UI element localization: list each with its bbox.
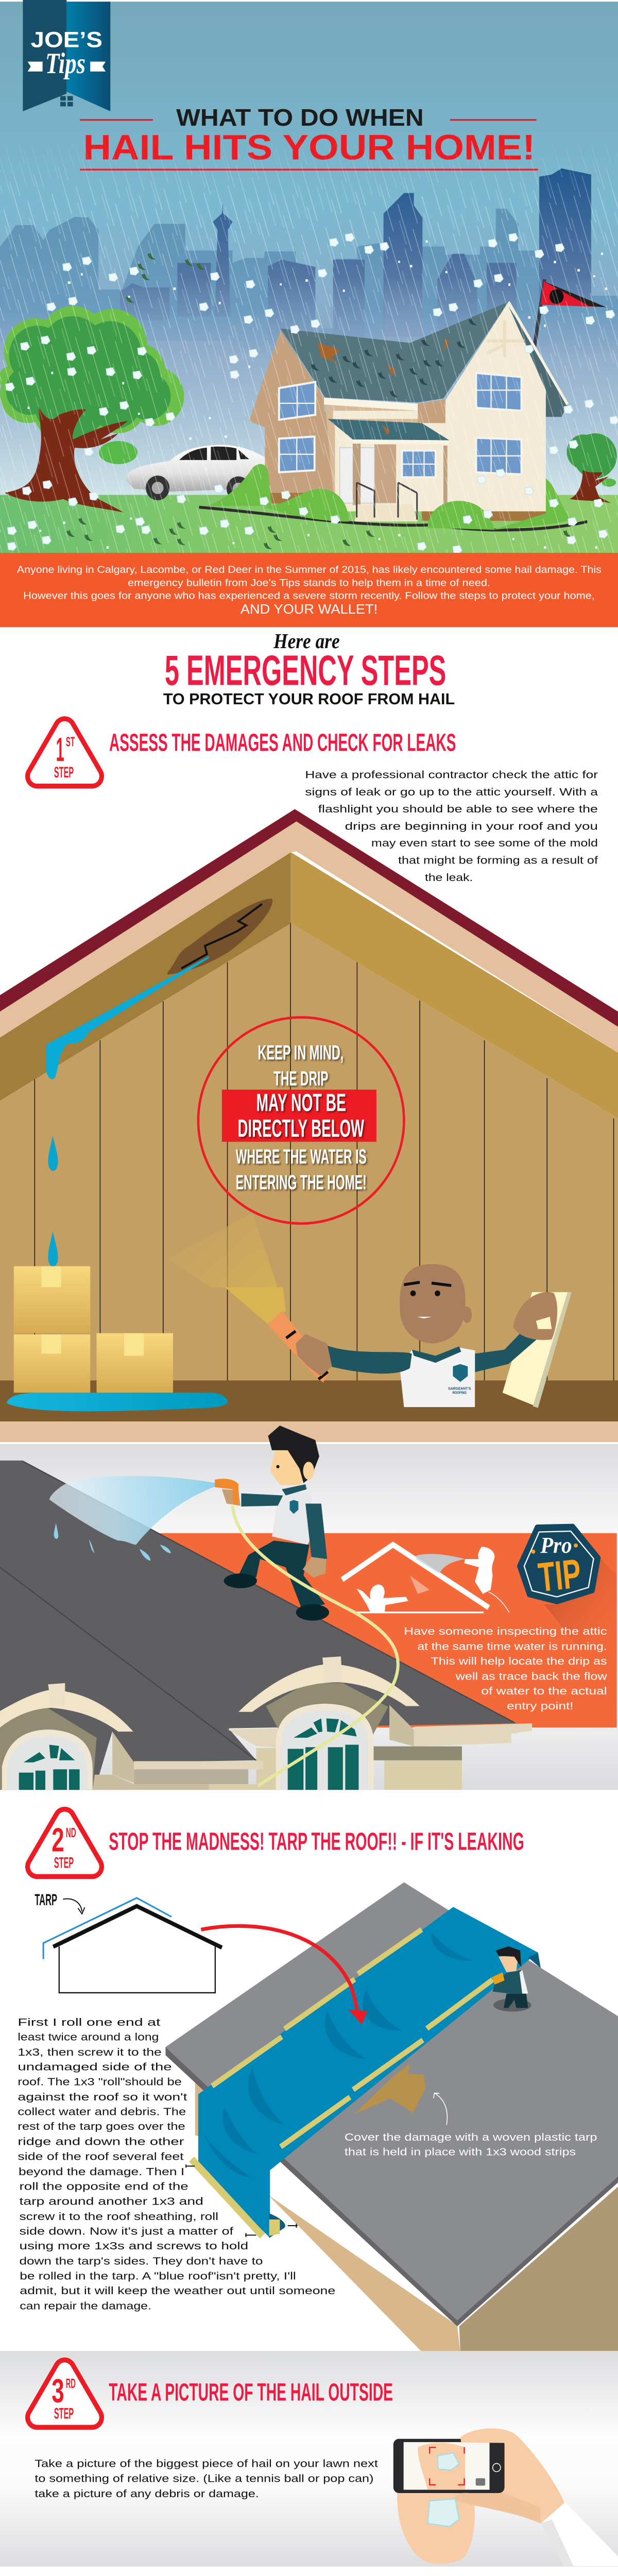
flashlight beam: [167, 1213, 286, 1325]
tip text: well as trace back the flow: [455, 1671, 607, 1683]
callout circle: keep in mind: MAY NOT BE: [256, 1089, 346, 1116]
step 2 body text: collect water and debris. The: [18, 2106, 186, 2118]
puddle: [7, 1393, 228, 1411]
step 2 body text: [18, 2016, 335, 2312]
hose scene: pro tip: [0, 1426, 618, 1790]
callout circle: keep in mind: WHERE THE WATER IS: [236, 1146, 367, 1168]
thumb over phone edge: [455, 2493, 541, 2523]
hailstones: [6, 233, 618, 554]
right hand behind phone: [455, 2428, 564, 2523]
tarp caption: [345, 2132, 597, 2158]
step 3 badge: STEP: [54, 2405, 74, 2422]
shirt cuff: [541, 2501, 618, 2566]
pro tip badge: TIP: [536, 1550, 583, 1601]
step 2 badge: [37, 1819, 92, 1872]
step 2 body text: against the roof so it won't: [18, 2092, 187, 2103]
step 2 body text: ridge and down the other: [18, 2136, 184, 2148]
city skyline: [0, 168, 618, 353]
left dormer: [0, 1703, 97, 1790]
tarp arrow: [63, 1899, 85, 1914]
title: WHAT TO DO WHEN: [176, 104, 424, 131]
floor trim: [0, 1421, 618, 1442]
tarp label: TARP: [35, 1891, 57, 1909]
phone body: [393, 2439, 505, 2493]
step 2 body text: be rolled in the tarp. A "blue roof"isn't pretty, I'll: [20, 2270, 296, 2282]
step 1 heading: [37, 728, 598, 884]
scene background: [0, 1444, 618, 1790]
tip text: of water to the actual: [481, 1686, 607, 1697]
step 2 badge: ND: [66, 1825, 76, 1840]
step 2 body text: side down. Now it's just a matter of: [20, 2226, 234, 2238]
step 3 body text: take a picture of any debris or damage.: [35, 2488, 259, 2500]
banner: Joe's Tips: Tips: [45, 47, 85, 80]
step 1 badge: 1: [56, 731, 64, 768]
attic illustration: lower part with Joe: [0, 1264, 618, 1442]
attic wall: [0, 923, 618, 1289]
boxes: [14, 1266, 173, 1393]
step 2 badge: 2: [52, 1821, 64, 1859]
dents on ground: [66, 252, 572, 549]
roof top: [0, 809, 618, 1027]
step 3 body text: to something of relative size. (Like a tennis ball or pop can): [35, 2473, 374, 2485]
step 1 body text: [305, 769, 598, 884]
rain: [0, 135, 618, 553]
title: HAIL HITS YOUR HOME!: [83, 128, 535, 167]
intro band: Anyone living in Calgary, Lacombe, or Red Deer in the Summer of 2015, has likely encountered some hail damage. This: [17, 564, 602, 575]
windows: [279, 373, 522, 477]
tip text: at the same time water is running.: [417, 1641, 607, 1652]
phone and hands illustration: [393, 2428, 618, 2566]
man on roof with hose: [215, 1426, 398, 1786]
5 emergency steps headline: 5 EMERGENCY STEPS: [165, 647, 446, 694]
dents on roof: [311, 318, 477, 397]
step 3 badge: 3: [52, 2372, 64, 2410]
intro band: AND YOUR WALLET!: [241, 602, 377, 617]
water spray: [49, 1476, 217, 1545]
callout circle: keep in mind: KEEP IN MIND,: [258, 1042, 344, 1064]
water stream: [46, 956, 209, 1079]
roll end: [269, 2213, 285, 2238]
house roof with dormers: [0, 1461, 532, 1790]
phone screen: [404, 2442, 490, 2490]
step 3 badge: [37, 2370, 92, 2422]
Joe holding flashlight and paper: [268, 1264, 572, 1408]
step 1 badge: [37, 728, 92, 781]
right dormer: [266, 1683, 388, 1790]
step 2 body text: undamaged side of the: [18, 2061, 172, 2073]
tarp illustration: [18, 1883, 618, 2352]
pro tip badge shadow: [544, 1559, 617, 1657]
nails: [186, 2164, 298, 2237]
attic illustration: upper part: [0, 809, 618, 1325]
step 2 body text: tarp around another 1x3 and: [20, 2196, 203, 2207]
small worker: [492, 1946, 531, 2012]
intro band: emergency bulletin from Joe's Tips stands to help them in a time of need.: [128, 577, 490, 588]
step 1 badge: STEP: [54, 765, 74, 781]
tip text: Have someone inspecting the attic: [404, 1625, 607, 1637]
right small tree: [567, 433, 617, 503]
step 3: [0, 2351, 618, 2567]
orange tip panel: [160, 1533, 617, 1727]
wood strips: [192, 1929, 493, 2236]
intro band: However this goes for anyone who has experienced a severe storm recently. Follow the steps to protect your home,: [23, 590, 595, 601]
step 3 title: TAKE A PICTURE OF THE HAIL OUTSIDE: [109, 2379, 393, 2406]
step 1 badge: ST: [66, 735, 75, 750]
here are: Here are: [273, 629, 340, 653]
house: [199, 302, 587, 530]
blue tarp: [198, 1907, 541, 2238]
step 2 body text: First I roll one end at: [18, 2016, 161, 2028]
step 2 body text: down the tarp's sides. They don't have to: [20, 2256, 263, 2267]
callout circle: keep in mind: ENTERING THE HOME!: [236, 1172, 367, 1194]
callout circle: keep in mind: THE DRIP: [273, 1067, 329, 1090]
water drips: [48, 1136, 58, 1267]
thin arrow: [434, 2093, 447, 2125]
tip icon: house with two figures: [342, 1545, 509, 1613]
step 1 body text: may even start to see some of the mold: [371, 838, 598, 849]
pro tip badge: [520, 1526, 598, 1602]
big roof: [165, 1883, 618, 2352]
Joe holding flashlight and paper: SARGEANT'S: [448, 1387, 471, 1391]
step 2 badge: STEP: [54, 1855, 74, 1872]
pennant flag: [534, 279, 606, 349]
step 2: [35, 1819, 524, 1914]
step 2 body text: rest of the tarp goes over the: [18, 2121, 185, 2132]
tip text: This will help locate the drip as: [431, 1656, 607, 1667]
step 1 body text: drips are beginning in your roof and you: [345, 821, 598, 832]
step 2 body text: least twice around a long: [18, 2031, 159, 2043]
title: [80, 104, 538, 170]
roof crack and stain: [167, 899, 272, 975]
step 1 body text: that might be forming as a result of: [398, 855, 598, 867]
step 1 body text: the leak.: [425, 872, 473, 884]
step 3 background: [0, 2351, 618, 2567]
roof damage: [317, 339, 449, 435]
section heading: 5 emergency steps: [163, 629, 455, 708]
step 2 body text: side of the roof several feet: [18, 2151, 184, 2163]
rafters: [0, 852, 291, 1100]
roof fascia: [0, 821, 618, 1053]
subheading: TO PROTECT YOUR ROOF FROM HAIL: [163, 691, 455, 708]
red arrow: [201, 1926, 358, 2016]
tip text: entry point!: [507, 1701, 574, 1712]
Joe holding flashlight and paper: ROOFING: [453, 1392, 467, 1395]
pro tip badge: Pro: [540, 1533, 572, 1558]
sky: [0, 2, 618, 499]
step 2 body text: using more 1x3s and screws to hold: [20, 2241, 248, 2252]
callout circle: keep in mind: [198, 1018, 404, 1224]
step 2 body text: beyond the damage. Then I: [19, 2166, 184, 2178]
gutters and walls: [228, 1723, 532, 1748]
car: [126, 445, 268, 501]
tip text: [404, 1625, 607, 1712]
tree: [0, 306, 184, 513]
banner: Joe's Tips: JOE’S: [31, 28, 102, 52]
water droplets: [54, 1523, 171, 1561]
step 1 body text: flashlight you should be able to see where the: [318, 804, 598, 815]
red arrowhead: [349, 2010, 367, 2024]
floor: [0, 1380, 618, 1421]
bushes: [207, 464, 572, 530]
step 2 body text: admit, but it will keep the weather out until someone: [20, 2285, 335, 2297]
tarp diagram house: [43, 1898, 222, 1993]
hero section: hail storm scene: [0, 0, 618, 554]
step 2 body text: can repair the damage.: [20, 2300, 151, 2312]
tarp caption: Cover the damage with a woven plastic tarp: [345, 2132, 597, 2143]
step 1 body text: Have a professional contractor check the attic for: [305, 769, 598, 781]
step 3 body text: [35, 2458, 379, 2500]
step 2 body text: roof. The 1x3 "roll"should be: [18, 2076, 182, 2088]
fingers over phone edge: [460, 2430, 506, 2443]
beam lower: [225, 1287, 286, 1324]
step 2 body text: 1x3, then screw it to the: [18, 2047, 162, 2058]
roof damage: [355, 2063, 426, 2114]
attic wall lower: [0, 1287, 618, 1381]
step 3 body text: Take a picture of the biggest piece of hail on your lawn next: [35, 2458, 379, 2470]
step 3 badge: RD: [66, 2376, 76, 2391]
lower palm: [397, 2490, 475, 2564]
step 2 body text: roll the opposite end of the: [20, 2181, 188, 2193]
step 2 body text: screw it to the roof sheathing, roll: [20, 2211, 218, 2223]
callout circle: keep in mind: DIRECTLY BELOW: [237, 1115, 365, 1142]
tarp caption: that is held in place with 1x3 wood strips: [345, 2146, 576, 2158]
step 1 body text: signs of leak or go up to the attic yourself. With a: [305, 787, 598, 798]
ground: [0, 495, 618, 553]
intro band: [0, 553, 618, 627]
banner: Joe's Tips: [23, 0, 110, 111]
